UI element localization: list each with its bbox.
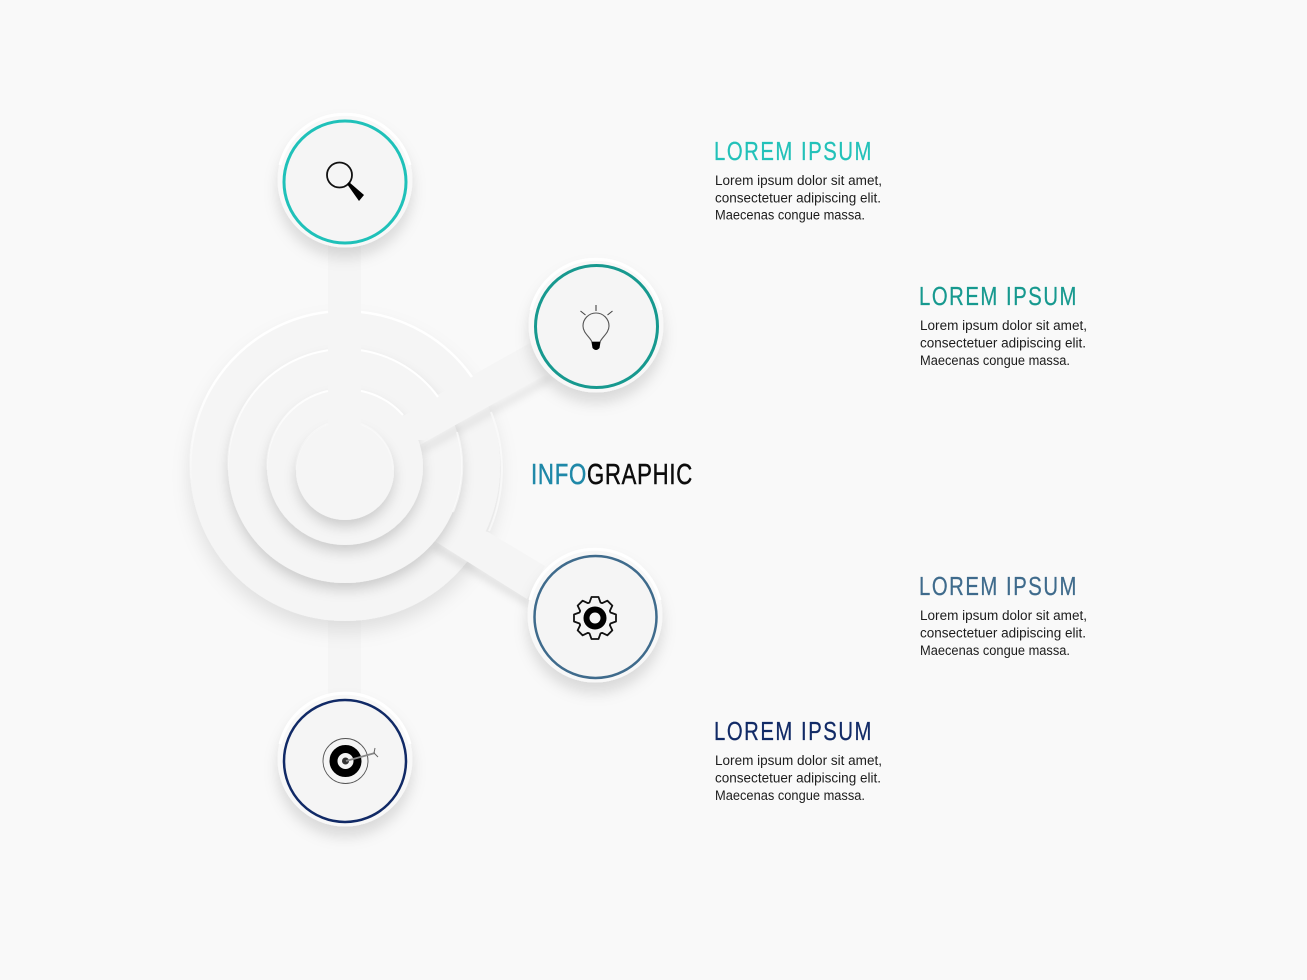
text block: step 4: Maecenas congue massa. xyxy=(715,788,865,803)
text block: step 1: Maecenas congue massa. xyxy=(715,208,865,222)
text block: step 3: Maecenas congue massa. xyxy=(920,643,1070,658)
connector: top bar xyxy=(328,240,361,430)
text block: step 2: consectetuer adipiscing elit. xyxy=(920,336,1086,350)
ring: second disc xyxy=(228,349,462,583)
ring: outer disc xyxy=(190,311,500,621)
text block: step 4: consectetuer adipiscing elit. xyxy=(715,770,881,786)
text block: step 3 xyxy=(919,571,1087,658)
text block: step 2: LOREM IPSUM xyxy=(919,281,1078,311)
icon: target with arrow xyxy=(323,738,378,784)
text block: step 1: consectetuer adipiscing elit. xyxy=(715,190,881,206)
text block: step 4: LOREM IPSUM xyxy=(714,716,873,746)
text block: step 3: Lorem ipsum dolor sit amet, xyxy=(920,608,1087,623)
node: idea xyxy=(528,258,664,392)
node: settings xyxy=(528,548,662,682)
connector: bottom bar xyxy=(328,610,361,710)
ring: third disc xyxy=(267,389,423,545)
node: search xyxy=(278,112,412,248)
cover over disc top edge for the diagonal bar xyxy=(403,377,480,440)
icon: light bulb xyxy=(580,305,612,350)
text block: step 1: Lorem ipsum dolor sit amet, xyxy=(715,173,882,188)
connector: upper diagonal bar xyxy=(400,343,552,456)
text block: step 2: Lorem ipsum dolor sit amet, xyxy=(920,318,1087,333)
text block: step 3: consectetuer adipiscing elit. xyxy=(920,626,1086,640)
panel: central concentric hub xyxy=(190,240,552,710)
text block: step 4: Lorem ipsum dolor sit amet, xyxy=(715,753,882,768)
text block: step 2: Maecenas congue massa. xyxy=(920,353,1070,368)
title: infographic xyxy=(531,459,693,491)
text block: step 1: LOREM IPSUM xyxy=(714,136,873,166)
ring highlights xyxy=(190,312,502,531)
connector: lower diagonal bar xyxy=(420,510,545,603)
node: target xyxy=(278,692,412,826)
icon: gear xyxy=(574,597,616,639)
text block: step 1 xyxy=(714,136,882,222)
text block: step 2 xyxy=(919,281,1087,368)
title: infographic: GRAPHIC xyxy=(587,459,693,491)
title: infographic: INFO xyxy=(531,459,587,491)
ring: inner disc xyxy=(296,422,394,520)
icon: magnifying glass xyxy=(327,162,364,201)
text block: step 3: LOREM IPSUM xyxy=(919,571,1078,601)
text block: step 4 xyxy=(714,716,882,803)
